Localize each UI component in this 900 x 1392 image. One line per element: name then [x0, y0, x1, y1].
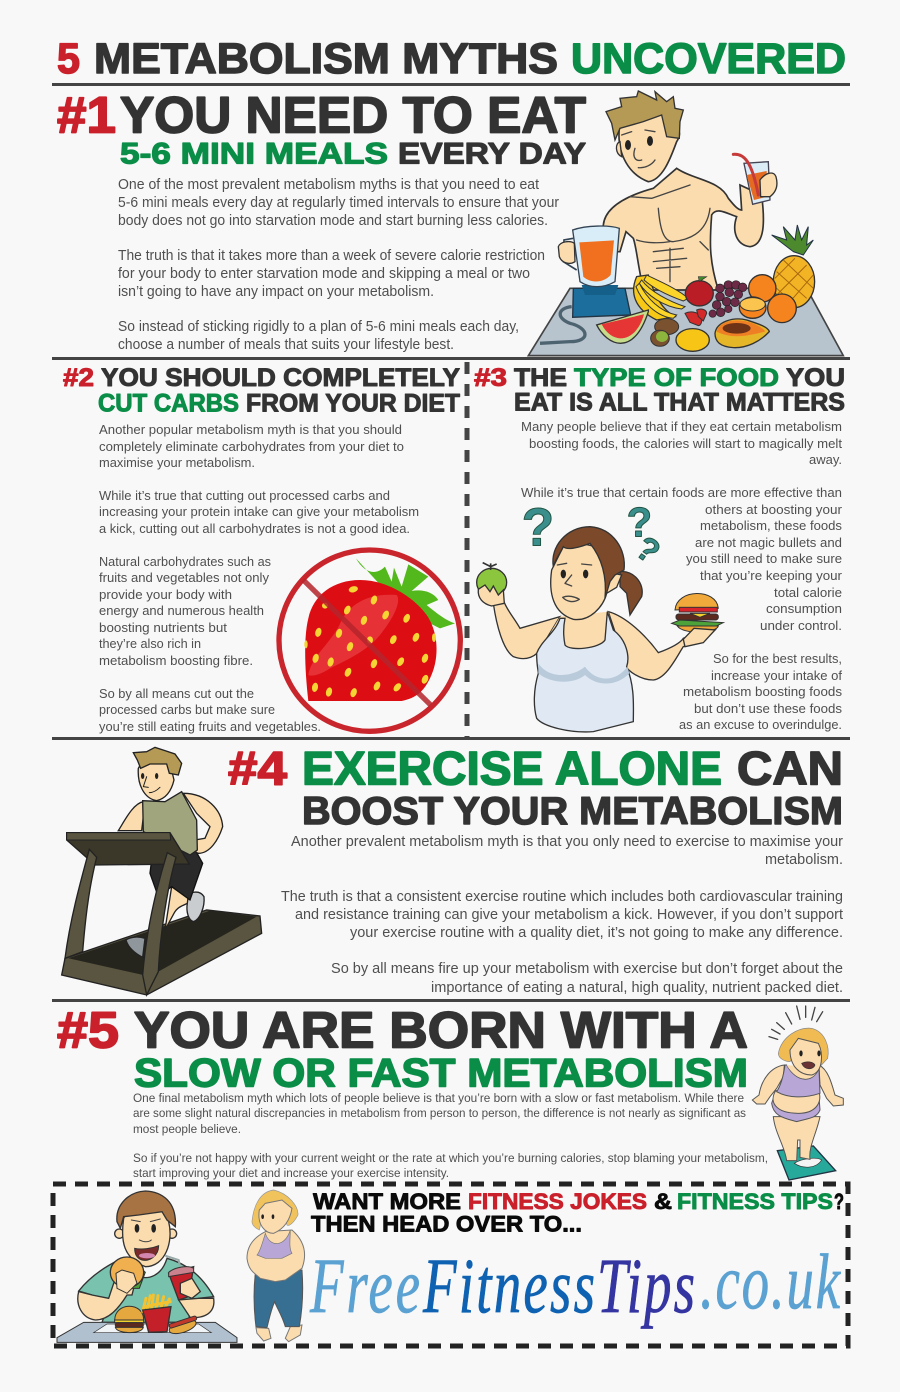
myth 2 body text: maximise your metabolism.: [99, 455, 255, 470]
myth 3 heading: TYPE OF FOOD: [574, 364, 779, 392]
call to action heading: THEN HEAD OVER TO...: [311, 1212, 582, 1236]
panel: myth 1: [57, 86, 843, 356]
illustration: man running on treadmill: [62, 747, 262, 995]
myth 3 body text: are not magic bullets and: [695, 535, 842, 550]
hair: [252, 1190, 298, 1230]
question marks: ?: [522, 499, 554, 558]
head: [138, 760, 174, 801]
seeds: [304, 585, 436, 698]
panel: myth 5: [57, 1002, 843, 1180]
treadmill deck: [62, 910, 262, 995]
myth 3 heading: THE: [514, 364, 567, 392]
myth 5 body text: most people believe.: [133, 1122, 241, 1136]
myth 1 body text: body does not go into starvation mode and start burning less calories.: [118, 213, 548, 229]
strawberries: [685, 312, 702, 326]
question marks: ?: [627, 499, 652, 546]
myth 1 heading: #1: [57, 86, 116, 144]
myth 5 heading: SLOW OR FAST METABOLISM: [134, 1052, 748, 1096]
call to action heading: FITNESS JOKES: [468, 1189, 647, 1214]
lemon: [676, 329, 709, 351]
myth 3 body text: but don’t use these foods: [694, 701, 842, 716]
hair: [778, 1028, 828, 1067]
question marks: ?: [628, 530, 666, 571]
console: [67, 833, 189, 865]
myth 1 heading: YOU NEED TO EAT: [120, 86, 586, 144]
myth 2 heading: CUT CARBS: [98, 390, 239, 418]
legs and shoes: [165, 887, 193, 930]
uprights: [65, 849, 97, 958]
hair: [606, 91, 683, 140]
myth 4 heading: [228, 742, 843, 833]
title: UNCOVERED: [571, 35, 846, 83]
myth 2 body text: So by all means cut out the: [99, 686, 254, 701]
myth 3 body text: others at boosting your: [705, 502, 843, 517]
papaya: [715, 319, 769, 348]
top: [777, 1065, 820, 1097]
torso: [247, 1230, 305, 1282]
myth 2 body text: [99, 422, 419, 734]
myth 3 body text: While it’s true that certain foods are more effective than: [521, 485, 842, 500]
myth 2 body text: metabolism boosting fibre.: [99, 653, 253, 668]
myth 3 body text: away.: [809, 452, 842, 467]
myth 2 heading: [63, 364, 460, 418]
myth 4 body text: metabolism.: [765, 851, 843, 868]
illustration: confused woman with apple and burger: [477, 499, 723, 732]
hair: [117, 1191, 175, 1228]
title: [57, 35, 846, 83]
myth 4 body text: importance of eating a natural, high quality, nutrient packed diet.: [431, 979, 843, 996]
tank top: [534, 612, 633, 732]
myth 1 heading: EVERY DAY: [398, 138, 586, 170]
worry lines: [769, 1006, 823, 1039]
myth 3 heading: EAT IS ALL THAT MATTERS: [514, 388, 845, 416]
hand holding burger: [683, 628, 715, 647]
myth 2 body text: a kick, cutting out all carbohydrates is not a good idea.: [99, 521, 410, 536]
panel: myth 4: [62, 742, 844, 996]
shorts: [150, 847, 203, 900]
myth 2 body text: Natural carbohydrates such as: [99, 554, 271, 569]
legs: [773, 1117, 820, 1161]
face: [135, 1224, 139, 1233]
left arm: [493, 600, 560, 659]
myth 5 body text: One final metabolism myth which lots of people believe is that you’re born with a slow or fast metabolism. While there: [133, 1091, 744, 1105]
website name: [309, 1239, 841, 1329]
call to action heading: WANT MORE: [313, 1189, 461, 1214]
apple: [685, 281, 713, 306]
right arm: [183, 793, 223, 853]
head: [619, 113, 679, 182]
myth 2 body text: completely eliminate carbohydrates from your diet to: [99, 439, 404, 454]
chest: [550, 612, 614, 650]
myth 3 body text: you still need to make sure: [686, 551, 842, 566]
face: [625, 140, 631, 150]
title: 5: [57, 35, 80, 83]
myth 4 body text: [281, 833, 844, 996]
myth 3 body text: [521, 419, 843, 732]
right arm: [179, 1298, 214, 1318]
myth 3 body text: that you’re keeping your: [700, 568, 843, 583]
myth 5 heading: #5: [57, 1002, 119, 1058]
hand on glass: [760, 173, 777, 197]
scale: [777, 1146, 836, 1180]
myth 2 body text: you’re still eating fruits and vegetables.: [99, 719, 321, 734]
myth 1 heading: [57, 86, 586, 170]
myth 1 body text: The truth is that it takes more than a week of severe calorie restriction: [118, 248, 545, 264]
apple: [477, 568, 507, 596]
myth 4 body text: So by all means fire up your metabolism with exercise but don’t forget about the: [331, 960, 843, 977]
head: [259, 1200, 292, 1233]
burger: [672, 594, 723, 632]
myth 1 body text: One of the most prevalent metabolism myths is that you need to eat: [118, 177, 539, 193]
soda cup: [165, 1256, 180, 1268]
myth 3 body text: metabolism, these foods: [700, 518, 842, 533]
myth 3 body text: consumption: [766, 601, 842, 616]
hair: [553, 527, 624, 598]
myth 3 body text: under control.: [760, 618, 842, 633]
myth 2 body text: they’re also rich in: [99, 636, 201, 651]
panel: myth 3: [474, 364, 845, 732]
head: [790, 1038, 821, 1075]
myth 1 body text: isn’t going to have any impact on your metabolism.: [118, 284, 434, 300]
myth 5 body text: start improving your diet and increase your exercise intensity.: [133, 1166, 449, 1180]
grapes: [709, 281, 747, 317]
myth 5 heading: YOU ARE BORN WITH A: [134, 1002, 748, 1058]
call to action heading: &: [654, 1189, 672, 1214]
icon: crossed-out strawberry: [279, 550, 460, 731]
myth 2 heading: #2: [63, 364, 94, 392]
dashed border: [53, 1184, 848, 1346]
myth 2 body text: fruits and vegetables not only: [99, 570, 269, 585]
hand on burger: [116, 1270, 137, 1293]
myth 2 body text: processed carbs but make sure: [99, 702, 275, 717]
myth 3 heading: YOU: [786, 364, 845, 392]
hand on cup: [180, 1278, 200, 1298]
myth 3 body text: Many people believe that if they eat certain metabolism: [521, 419, 842, 434]
face: [141, 773, 144, 779]
myth 5 body text: are some slight natural discrepancies in metabolism from person to person, the difference is not nearly as significant as: [133, 1106, 746, 1120]
head: [123, 1210, 170, 1267]
bra top: [257, 1230, 292, 1258]
shorts: [772, 1093, 820, 1122]
myth 4 heading: CAN: [737, 742, 843, 794]
watermelon: [597, 310, 648, 343]
illustration: overweight man eating fast food: [57, 1190, 305, 1342]
woman struggling with jeans: [247, 1190, 305, 1342]
kiwi: [655, 319, 679, 335]
panel: call to action: [53, 1184, 848, 1346]
myth 3 body text: boosting foods, the calories will start to magically melt: [529, 436, 842, 451]
tray: [57, 1322, 237, 1342]
strawberry leaves: [356, 558, 455, 628]
call to action heading: FITNESS TIPS: [677, 1189, 833, 1214]
burger in hand: [132, 1265, 145, 1288]
myth 2 body text: boosting nutrients but: [99, 620, 227, 635]
tee shirt: [79, 1258, 214, 1322]
left arm: [118, 802, 143, 831]
head: [551, 540, 622, 620]
myth 2 body text: Another popular metabolism myth is that you should: [99, 422, 402, 437]
call to action heading: [311, 1189, 844, 1236]
burger on tray: [115, 1306, 144, 1333]
right arm: [608, 612, 715, 680]
prohibition ring: [279, 550, 460, 731]
hot dog: [168, 1317, 198, 1336]
arms: [752, 1065, 784, 1104]
cord: [540, 307, 585, 343]
myth 3 heading: [474, 364, 845, 416]
feet: [256, 1325, 302, 1342]
panel: myth 2: [63, 364, 460, 734]
myth 1 body text: So instead of sticking rigidly to a plan of 5-6 mini meals each day,: [118, 319, 519, 335]
oranges: [749, 275, 776, 302]
ears: [115, 1229, 124, 1238]
bananas: [634, 275, 675, 320]
myth 2 heading: YOU SHOULD COMPLETELY: [101, 364, 460, 392]
fries: [143, 1295, 170, 1312]
question marks: [522, 499, 666, 571]
torso and arms: [600, 168, 763, 290]
myth 1 body text: choose a number of meals that suits your lifestyle best.: [118, 337, 454, 353]
myth 1 body text: for your body to enter starvation mode and skipping a meal or two: [118, 266, 530, 282]
myth 4 heading: #4: [228, 742, 287, 794]
illustration: muscular man with blender and fruit: [528, 91, 843, 356]
jeans: [254, 1270, 303, 1328]
myth 5 body text: [133, 1091, 768, 1180]
myth 4 body text: your exercise routine with a quality diet, it’s not going to make any difference.: [350, 924, 843, 941]
face: [561, 570, 566, 578]
myth 4 heading: EXERCISE ALONE: [302, 742, 722, 794]
myth 1 heading: 5-6 MINI MEALS: [120, 138, 388, 170]
myth 2 body text: energy and numerous health: [99, 603, 264, 618]
title: METABOLISM MYTHS: [94, 35, 558, 83]
myth 5 heading: [57, 1002, 748, 1096]
myth 5 body text: So if you’re not happy with your current weight or the rate at which you’re burning calories, stop blaming your metabolism,: [133, 1151, 768, 1165]
myth 4 heading: BOOST YOUR METABOLISM: [302, 790, 843, 833]
website name: Fitness: [422, 1243, 595, 1329]
website name: Free: [309, 1243, 420, 1329]
myth 3 body text: So for the best results,: [713, 651, 842, 666]
myth 3 heading: #3: [474, 364, 507, 392]
table: [528, 288, 843, 356]
call to action heading: ?: [834, 1189, 844, 1214]
myth 2 heading: FROM YOUR DIET: [246, 390, 460, 418]
hand holding apple: [478, 585, 504, 606]
myth 3 body text: as an excuse to overindulge.: [679, 717, 842, 732]
myth 4 body text: and resistance training can give your metabolism a kick. However, if you don’t support: [295, 906, 844, 923]
strawberry body: [305, 580, 437, 701]
myth 2 body text: provide your body with: [99, 587, 232, 602]
myth 3 body text: increase your intake of: [711, 668, 842, 683]
website name: Tips: [597, 1243, 695, 1329]
illustration: worried woman on scale: [752, 1006, 843, 1180]
myth 4 body text: Another prevalent metabolism myth is that you only need to exercise to maximise your: [291, 833, 843, 850]
blender: [573, 288, 631, 317]
myth 2 body text: increasing your protein intake can give your metabolism: [99, 504, 419, 519]
myth 3 body text: metabolism boosting foods: [683, 684, 842, 699]
pineapple: [772, 225, 813, 255]
hair: [133, 747, 182, 775]
ponytail: [620, 572, 642, 615]
myth 3 body text: total calorie: [774, 585, 842, 600]
glass of juice: [744, 162, 770, 204]
myth 2 body text: While it’s true that cutting out processed carbs and: [99, 488, 390, 503]
tank top: [143, 792, 197, 855]
website name: .co.uk: [700, 1239, 841, 1325]
myth 1 body text: [118, 177, 559, 353]
belly: [773, 1091, 820, 1113]
myth 4 body text: The truth is that a consistent exercise routine which includes both cardiovascular training: [281, 888, 843, 905]
left arm: [78, 1278, 135, 1320]
myth 1 body text: 5-6 mini meals every day at regularly timed intervals to ensure that your: [118, 195, 559, 211]
hand on blender: [558, 242, 575, 263]
